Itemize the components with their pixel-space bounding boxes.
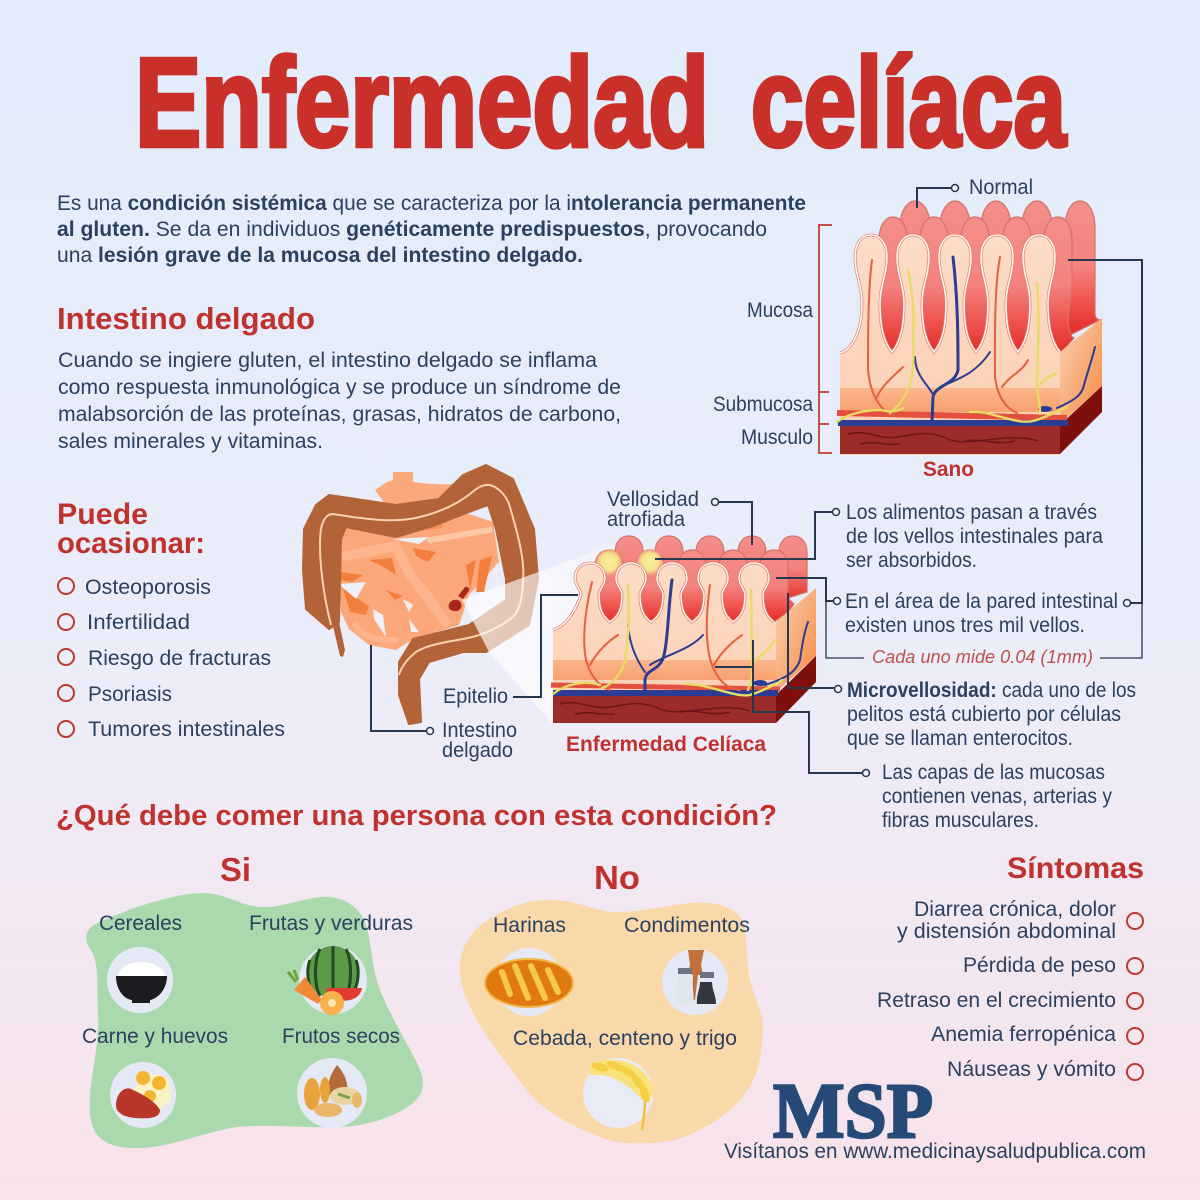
icon: meat and eggs	[110, 1062, 176, 1128]
label: vellosidad atrofiada: Vellosidad	[607, 488, 699, 511]
callout: pared intestinal: existen unos tres mil vellos.	[845, 614, 1085, 637]
blood vessels	[868, 260, 903, 415]
label: cebada centeno trigo: Cebada, centeno y trigo	[513, 1027, 737, 1050]
list: puede ocasionar: Osteoporosis	[85, 576, 211, 599]
intro text: Es una condición sistémica que se caracteriza por la intolerancia permanente	[57, 192, 806, 215]
label: submucosa: Submucosa	[713, 393, 813, 416]
list: sintomas: Pérdida de peso	[963, 954, 1116, 977]
label: epitelio	[443, 595, 578, 708]
small intestine mass	[339, 512, 499, 650]
muscle layer	[840, 425, 1060, 454]
icon: rice bowl	[107, 947, 173, 1013]
paragraph: intestino delgado: como respuesta inmunológica y se produce un síndrome de	[58, 376, 621, 399]
list: puede ocasionar	[58, 576, 285, 741]
callout: los alimentos: ser absorbidos.	[846, 549, 977, 572]
muscle layer	[553, 695, 776, 723]
list: puede ocasionar: Psoriasis	[88, 683, 172, 706]
intro text: una lesión grave de la mucosa del intestino delgado.	[57, 244, 583, 267]
inflamed spot	[449, 587, 469, 611]
label: harinas: Harinas	[493, 914, 566, 937]
callout: pared intestinal	[776, 578, 1118, 637]
callout: microvellosidad: Microvellosidad: cada uno de los	[847, 679, 1136, 702]
callout: capas de las mucosas: contienen venas, arterias y	[882, 785, 1112, 808]
label: mucosa: Mucosa	[747, 299, 813, 322]
panel: si foods	[82, 851, 423, 1148]
submucosa band	[553, 660, 776, 680]
label: cereales: Cereales	[99, 912, 182, 935]
heading: puede ocasionar: Puede	[57, 498, 148, 531]
callout: microvellosidad	[788, 593, 1136, 750]
heading: que debe comer: ¿Qué debe comer una persona con esta condición?	[56, 800, 777, 832]
label: vellosidad atrofiada: atrofiada	[607, 508, 685, 531]
icon: condiments	[662, 949, 728, 1015]
callout: capas de las mucosas: Las capas de las mucosas	[882, 761, 1105, 784]
heading: puede ocasionar	[57, 498, 205, 560]
yellow glow on damaged villi	[595, 548, 623, 576]
label: intestino delgado	[371, 645, 517, 762]
list: sintomas: Diarrea crónica, dolor	[914, 898, 1116, 921]
middle row of villi	[595, 550, 794, 624]
intro text	[57, 192, 806, 267]
scalloped colon edge	[307, 470, 534, 658]
middle row of villi	[879, 217, 1074, 356]
back row of villi	[615, 536, 807, 602]
callout: capas de las mucosas: fibras musculares.	[882, 809, 1039, 832]
label: carne y huevos: Carne y huevos	[82, 1025, 228, 1048]
list: sintomas: Anemia ferropénica	[931, 1023, 1116, 1046]
paragraph: intestino delgado: Cuando se ingiere gluten, el intestino delgado se inflama	[58, 349, 597, 372]
illustration: small intestine	[303, 465, 538, 724]
illustration: atrophied villi tissue	[551, 536, 816, 723]
list: puede ocasionar: Infertilidad	[87, 611, 190, 634]
illustration: healthy mucosa tissue	[837, 201, 1102, 455]
callout: los alimentos: de los vellos intestinales para	[846, 525, 1103, 548]
label: enfermedad celiaca: Enfermedad Celíaca	[566, 733, 766, 756]
large intestine	[303, 465, 538, 724]
label: intestino delgado: delgado	[442, 739, 513, 762]
gaps between the loops	[339, 537, 500, 637]
list: sintomas: Retraso en el crecimiento	[877, 989, 1116, 1012]
heading: intestino delgado: Intestino delgado	[57, 301, 315, 336]
paragraph: intestino delgado: malabsorción de las proteínas, grasas, hidratos de carbono,	[58, 403, 621, 426]
label: intestino delgado: Intestino	[442, 719, 517, 742]
heading: no: No	[594, 859, 640, 896]
callout: capas de las mucosas	[715, 640, 1112, 832]
label: normal	[917, 176, 1033, 208]
heading: puede ocasionar: ocasionar:	[57, 527, 205, 560]
label: musculo: Musculo	[741, 426, 813, 449]
side face	[1060, 318, 1102, 424]
heading: si: Si	[220, 851, 251, 888]
icon: nuts	[297, 1058, 367, 1128]
intro text: al gluten. Se da en individuos genéticamente predispuestos, provocando	[57, 218, 767, 241]
icon: bread	[485, 948, 573, 1016]
front face	[553, 563, 776, 723]
icon: fruit and vegetables	[288, 946, 367, 1015]
label: normal: Normal	[969, 176, 1033, 199]
callout: cada uno mide	[826, 601, 1142, 667]
callout: microvellosidad: pelitos está cubierto por células	[847, 703, 1121, 726]
paragraph: intestino delgado: sales minerales y vitaminas.	[58, 430, 323, 453]
logo: msp: MSP	[773, 1067, 933, 1154]
zoom lens	[462, 545, 640, 723]
title: celíaca	[751, 32, 1067, 173]
appendix	[333, 622, 345, 657]
icon: wheat	[583, 1058, 653, 1130]
callout: los alimentos: Los alimentos pasan a través	[846, 501, 1097, 524]
red and blue horizontal vessels	[837, 413, 1067, 418]
panel: no foods	[460, 859, 763, 1143]
label: frutos secos: Frutos secos	[282, 1025, 400, 1048]
title: Enfermedad	[135, 32, 709, 173]
callout: pared intestinal: En el área de la pared intestinal	[845, 590, 1118, 613]
red and blue horizontal vessels	[551, 685, 780, 689]
callout: microvellosidad: que se llaman enterocitos.	[847, 727, 1073, 750]
list: sintomas	[877, 898, 1143, 1081]
paragraph: intestino delgado	[58, 349, 621, 453]
submucosa band	[840, 388, 1060, 412]
stomach piece	[375, 472, 465, 510]
website: Visítanos en www.medicinaysaludpublica.com	[724, 1140, 1146, 1163]
list: sintomas: Náuseas y vómito	[947, 1058, 1116, 1081]
list: puede ocasionar: Tumores intestinales	[88, 718, 285, 741]
list: sintomas: y distensión abdominal	[897, 920, 1116, 943]
intestinal folds	[339, 548, 492, 615]
colon inner line	[320, 485, 523, 675]
orange blob	[460, 900, 763, 1143]
label: epitelio: Epitelio	[443, 685, 508, 708]
callout: cada uno mide: Cada uno mide 0.04 (1mm)	[872, 647, 1093, 667]
label: condimentos: Condimentos	[624, 914, 750, 937]
label: sano: Sano	[923, 458, 974, 481]
green blob	[86, 893, 423, 1148]
label: frutas y verduras: Frutas y verduras	[249, 912, 413, 935]
side face	[776, 588, 816, 692]
blood vessels	[584, 582, 618, 690]
front face with finger-like villi	[840, 235, 1060, 455]
back row of villi	[900, 201, 1102, 336]
connector: healthy villi to vellos text	[1068, 260, 1142, 606]
label: vellosidad atrofiada	[607, 488, 752, 545]
bracket: tissue layers	[819, 225, 832, 453]
callout: los alimentos	[655, 501, 1103, 572]
list: puede ocasionar: Riesgo de fracturas	[88, 647, 271, 670]
heading: sintomas: Síntomas	[1007, 852, 1144, 885]
